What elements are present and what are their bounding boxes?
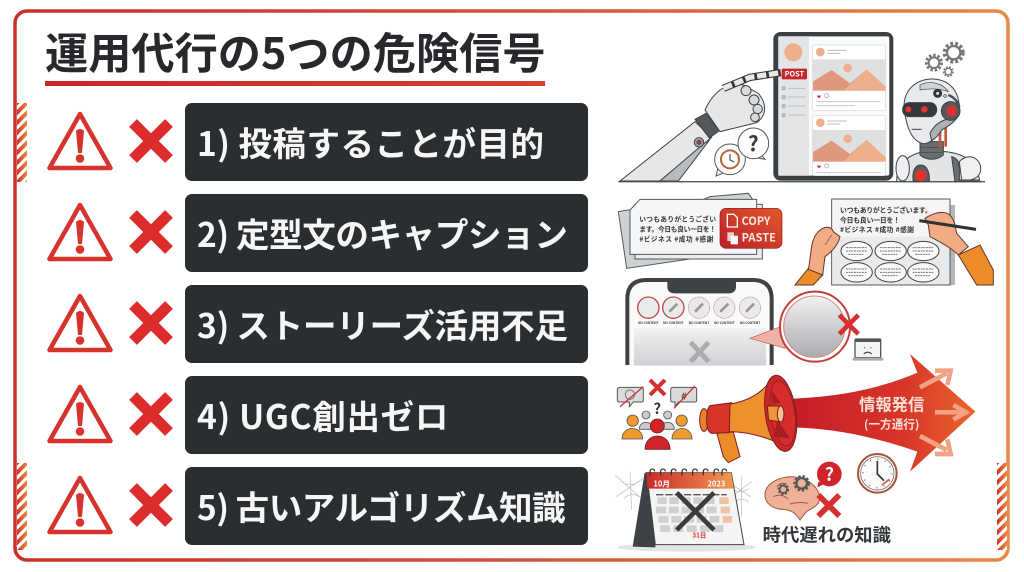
- arrow: one-way information: [794, 354, 975, 472]
- bar: item 1: 1) 投稿することが目的: [197, 117, 545, 166]
- icon: phone with empty stories: NO CONTENT: [638, 320, 659, 325]
- icon: clock and question speech bubbles: ?: [748, 127, 759, 157]
- icon: gears: [927, 44, 962, 76]
- icon: wall clock: [858, 454, 897, 493]
- bar: item 5: 5) 古いアルゴリズム知識: [197, 481, 565, 530]
- icon: warning triangle and cross: [47, 294, 173, 352]
- illustration 3: one-way megaphone: [615, 354, 975, 552]
- icon: old calendar with cobwebs: [615, 469, 756, 552]
- button: copy paste: [720, 208, 782, 248]
- icon: outdated brain with gears: [765, 461, 842, 520]
- icon: sheet with handwritten caption: #ビジネス #成功 #感謝: [840, 224, 914, 234]
- icon: outdated brain with gears: ?: [825, 461, 834, 487]
- label: one-way communication: (一方通行): [864, 416, 919, 433]
- icon: warning triangle and cross: [47, 384, 173, 444]
- row 3: warning item: [47, 285, 588, 363]
- illustration 2: template captions: [618, 193, 993, 366]
- icon: audience with crossed-out reactions: #: [681, 388, 687, 402]
- icon: sheet with handwritten caption: いつもありがとうございます。: [840, 204, 932, 214]
- icon: phone with empty stories: NO CONTENT: [740, 320, 760, 325]
- button: copy paste: PASTE: [742, 229, 776, 245]
- label: one-way communication: 情報発信: [859, 392, 924, 416]
- icon: small arrows: [920, 371, 966, 454]
- icon: old calendar with cobwebs: 10月: [653, 479, 670, 490]
- icon: right hand with pen: [919, 212, 993, 285]
- icon: stacked paper with caption: ます。今日も良い一日を！: [639, 224, 716, 234]
- icon: clock and question speech bubbles: [715, 127, 769, 176]
- button: POST: POST: [785, 69, 805, 80]
- label: outdated knowledge: 時代遅れの知識: [763, 522, 892, 548]
- bar: item 2: 2) 定型文のキャプション: [197, 208, 567, 257]
- icon: robot arm pressing post: [620, 73, 781, 181]
- icon: warning triangle and cross: [47, 476, 173, 534]
- icon: phone with empty stories: [627, 280, 772, 366]
- icon: sheet with handwritten caption: 今日も良い一日を！: [840, 214, 900, 224]
- row 1: warning item: [47, 103, 588, 181]
- icon: phone with empty stories: NO CONTENT: [663, 320, 684, 325]
- icon: warning triangle and cross: [47, 112, 173, 170]
- bar: item 3: [185, 285, 588, 363]
- icon: phone with empty stories: NO CONTENT: [689, 320, 709, 325]
- ground line: [618, 180, 985, 184]
- row 4: warning item: [47, 376, 588, 454]
- bar: item 3: 3) ストーリーズ活用不足: [197, 299, 568, 348]
- icon: magnified empty story circle: [750, 292, 858, 362]
- icon: megaphone: [700, 373, 801, 463]
- icon: sheet with handwritten caption: [832, 199, 955, 285]
- bar: item 5: [185, 467, 588, 545]
- bar: item 1: [185, 103, 588, 181]
- icon: sad laptop: [853, 339, 883, 361]
- icon: left hand holding sheet: [795, 227, 840, 285]
- icon: tablet with posts: [773, 32, 893, 181]
- icon: stacked paper with caption: いつもありがとうござい: [639, 214, 716, 224]
- row 2: warning item: [47, 194, 588, 272]
- bar: item 4: [185, 376, 588, 454]
- icon: stacked paper with caption: [618, 193, 762, 268]
- icon: audience with crossed-out reactions: [617, 380, 697, 449]
- icon: old calendar with cobwebs: 31日: [692, 531, 706, 540]
- icon: warning triangle and cross: [47, 202, 173, 262]
- illustration 1: robot posting on tablet: [618, 32, 985, 182]
- label: one-way communication: [859, 392, 924, 433]
- title: 運用代行の5つの危険信号: [45, 20, 546, 82]
- icon: stacked paper with caption: #ビジネス #成功 #感謝: [639, 234, 714, 244]
- icon: robot: [896, 79, 981, 182]
- icon: old calendar with cobwebs: 2023: [707, 479, 726, 490]
- bar: item 2: [185, 194, 588, 272]
- row 5: warning item: [47, 467, 588, 545]
- bar: item 4: 4) UGC創出ゼロ: [197, 390, 449, 439]
- icon: phone with empty stories: NO CONTENT: [714, 320, 735, 325]
- icon: audience with crossed-out reactions: ?: [654, 398, 661, 419]
- button: copy paste: COPY: [742, 213, 771, 229]
